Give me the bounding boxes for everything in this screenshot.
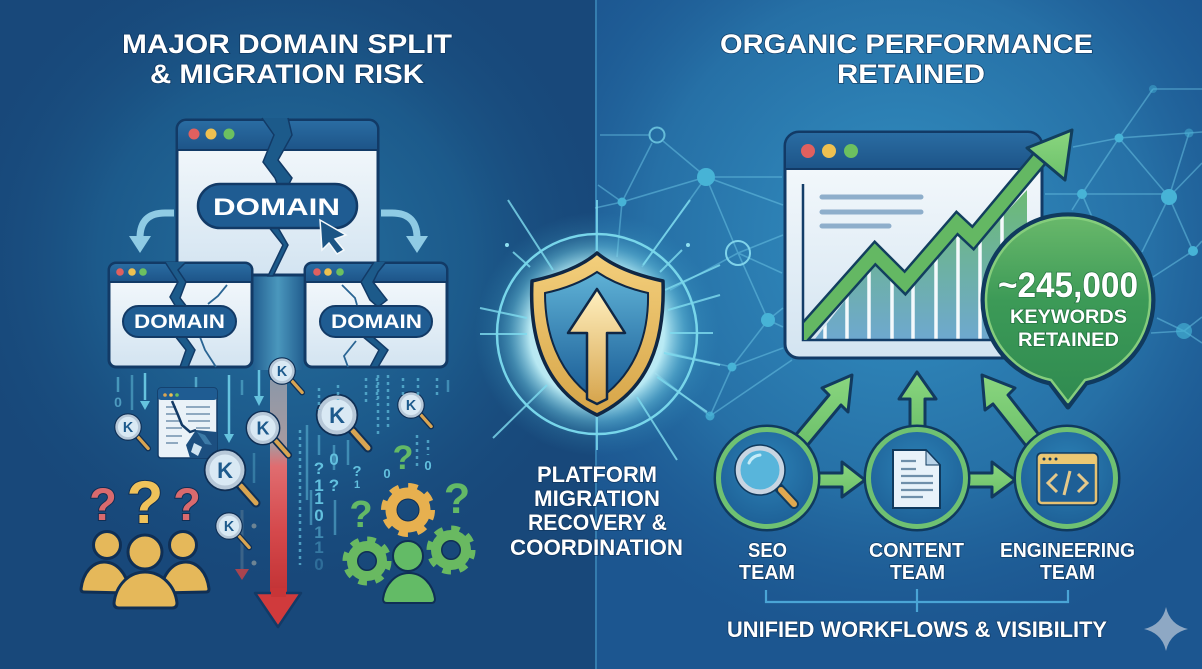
- keyword magnifier f: K: [329, 403, 345, 428]
- question marks: [89, 469, 201, 536]
- right child window: [305, 262, 447, 367]
- domain pill: DOMAIN: [331, 312, 422, 333]
- falling binary code: right: ?: [352, 463, 362, 480]
- icon: sparkle watermark: [1144, 607, 1188, 651]
- arrow: content to engineering: [965, 462, 1015, 497]
- keywords retained callout: KEYWORDS: [1010, 307, 1127, 328]
- crack: bottom: [268, 226, 288, 276]
- center label: COORDINATION: [510, 535, 683, 560]
- cracked document icon: [158, 388, 217, 458]
- main browser window: [177, 118, 378, 276]
- icon: document: [893, 450, 940, 508]
- domain pill: [198, 184, 357, 228]
- arrow: SEO up to window: [794, 375, 852, 447]
- split arrows: [129, 213, 428, 253]
- green question marks: ?: [393, 439, 413, 477]
- keywords retained callout: RETAINED: [1018, 330, 1119, 351]
- title: right: ORGANIC PERFORMANCE: [720, 29, 1093, 59]
- falling binary code: right: 0: [329, 450, 339, 469]
- keyword magnifier b: [269, 358, 302, 392]
- network lines: [595, 89, 1202, 416]
- faded small red arrow: [235, 510, 256, 580]
- title: left: [122, 29, 453, 89]
- cursor: [320, 220, 346, 254]
- keyword magnifier f: [317, 395, 368, 448]
- keyword magnifier c: K: [256, 419, 270, 439]
- background: right panel: [595, 0, 1202, 669]
- title: right: RETAINED: [837, 59, 985, 89]
- falling binary code: right: 1: [314, 538, 324, 557]
- keyword magnifier a: K: [123, 420, 134, 436]
- falling data streaks: left: [118, 370, 264, 483]
- keyword magnifier d: K: [217, 458, 233, 483]
- center label: PLATFORM: [537, 462, 657, 487]
- team labels: CONTENT: [869, 540, 964, 562]
- team circle: SEO: [717, 428, 817, 528]
- falling binary code: right: 0: [314, 555, 324, 574]
- team connecting arrows: [794, 372, 1040, 497]
- title: left: MAJOR DOMAIN SPLIT: [122, 29, 453, 59]
- keyword magnifier e: K: [224, 519, 235, 535]
- left child window: [109, 262, 252, 367]
- falling column behind red arrow: [253, 275, 303, 370]
- binary digit: left: 0: [114, 394, 122, 410]
- chart area bars: [810, 185, 1030, 341]
- icon: code window: [1037, 453, 1098, 505]
- confused team: gold people: [81, 469, 209, 608]
- background: left panel: [0, 0, 595, 669]
- red downward arrow: [255, 380, 301, 627]
- crack: top: [262, 118, 292, 186]
- team labels: ENGINEERING: [1000, 540, 1135, 562]
- green gear left: [346, 540, 388, 582]
- question marks: ?: [89, 479, 117, 530]
- team labels: SEO: [748, 540, 787, 562]
- keyword magnifier g: K: [406, 398, 417, 414]
- keyword magnifier d: [205, 450, 256, 503]
- falling binary code: right: [300, 375, 448, 574]
- falling binary code: right: 0: [314, 506, 324, 525]
- question marks: ?: [127, 469, 163, 536]
- keywords retained callout: [983, 215, 1153, 407]
- question marks: ?: [173, 479, 201, 530]
- green gear right: [430, 528, 472, 572]
- keyword magnifier g: [398, 392, 431, 426]
- team circle: engineering: [1017, 428, 1117, 528]
- unified workflows label: UNIFIED WORKFLOWS & VISIBILITY: [727, 617, 1107, 642]
- falling binary code: right: 0: [424, 458, 432, 473]
- keyword magnifier c: [247, 412, 288, 455]
- falling binary code: right: 1: [314, 523, 324, 542]
- title: right: [720, 29, 1093, 89]
- shield icon: [532, 253, 663, 415]
- team labels: TEAM: [1040, 562, 1095, 584]
- arrow: SEO to content: [815, 462, 865, 497]
- network nodes: [618, 85, 1198, 420]
- icon: magnifier: [735, 445, 794, 504]
- overwhelmed worker: gears and person: [346, 439, 472, 603]
- green person: [383, 541, 435, 603]
- arrow: content up to window: [899, 372, 936, 435]
- keyword magnifier b: K: [277, 364, 288, 380]
- falling binary code: right: 1: [354, 479, 360, 491]
- falling binary code: right: 1: [314, 476, 324, 495]
- green question marks: ?: [444, 475, 470, 523]
- gold gear: [384, 486, 432, 534]
- domain pill: [123, 306, 236, 337]
- arrow: engineering up to window: [982, 375, 1040, 447]
- green question marks: ?: [349, 494, 373, 536]
- team bracket: [766, 589, 1068, 612]
- title: left: & MIGRATION RISK: [150, 59, 425, 89]
- domain pill: DOMAIN: [213, 194, 340, 221]
- domain pill: DOMAIN: [134, 312, 225, 333]
- domain pill: [320, 306, 432, 337]
- falling binary code: right: ?: [329, 476, 339, 495]
- growth arrow: [795, 130, 1072, 343]
- keyword magnifier e: [216, 513, 249, 547]
- keywords retained callout: ~245,000: [998, 266, 1138, 305]
- center label: RECOVERY &: [528, 510, 667, 535]
- team labels: TEAM: [739, 562, 795, 584]
- falling binary code: right: 1: [314, 489, 324, 508]
- team labels: [739, 540, 1135, 584]
- performance browser window: [785, 132, 1042, 358]
- center label: [510, 462, 683, 560]
- falling binary code: right: ?: [314, 459, 324, 478]
- center label: MIGRATION: [534, 486, 660, 511]
- central glow and rays: [475, 200, 720, 460]
- team circle: content: [867, 428, 967, 528]
- keyword magnifier a: [115, 414, 148, 448]
- falling binary code: right: 0: [383, 466, 391, 481]
- green question marks: [349, 439, 470, 536]
- team labels: TEAM: [890, 562, 945, 584]
- shield arrow: [568, 289, 625, 404]
